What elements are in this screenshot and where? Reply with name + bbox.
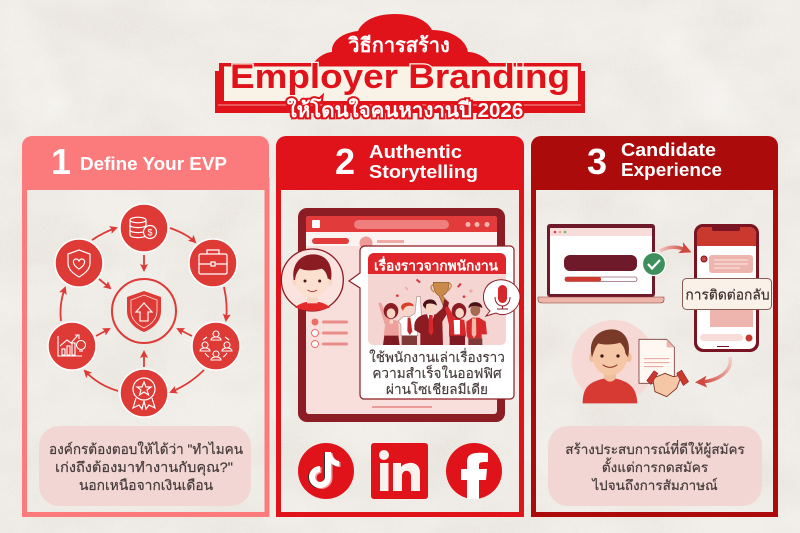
handshake [647, 370, 689, 397]
panel: authentic storytelling [276, 136, 524, 514]
title line 2: Employer Branding [230, 58, 570, 96]
icon: team [192, 322, 240, 370]
panel 2 header [276, 136, 524, 190]
panel 1 header [22, 136, 269, 190]
phone [694, 224, 759, 352]
icon: heart shield [55, 239, 103, 287]
panel: candidate experience [531, 136, 778, 514]
celebrating team illustration [368, 274, 506, 345]
icon: coins: $ [147, 228, 153, 238]
icon: LinkedIn [371, 443, 428, 499]
icon: TikTok [298, 443, 354, 499]
speech bubble: เรื่องราวจากพนักงาน [374, 256, 499, 274]
icon: Facebook [446, 443, 502, 499]
panel 3 frame [534, 180, 776, 514]
title cloud [313, 14, 490, 64]
panel 3 text box: ตั้งแต่การกดสมัคร [602, 457, 708, 475]
tablet mockup [298, 208, 505, 422]
microphone bubble [483, 280, 520, 316]
speech bubble [349, 246, 520, 399]
arrow: laptop to phone [660, 247, 686, 251]
panel 3 text box [548, 426, 762, 506]
panel 2 number: 2 [335, 141, 355, 182]
bubble text: ใช้พนักงานเล่าเรื่องราว [369, 348, 505, 365]
central shield [112, 279, 176, 343]
candidate illustration [572, 320, 655, 403]
panel: define your EVP [22, 136, 269, 514]
panel 1 number: 1 [51, 141, 71, 182]
laptop [538, 224, 666, 303]
arrow: phone to handshake [701, 357, 730, 382]
panel 1 text box: นอกเหนือจากเงินเดือน [79, 478, 214, 493]
title banner [215, 14, 585, 122]
bubble text: ผ่านโซเชียลมีเดีย [386, 381, 488, 397]
bubble text [369, 348, 505, 397]
arrows cycle [60, 228, 227, 392]
panel 3 number: 3 [587, 141, 607, 182]
panel 1 text box [39, 426, 251, 506]
document [639, 339, 674, 383]
panel 2 frame [278, 180, 522, 514]
panel 2 heading [369, 141, 478, 182]
panel 3 header [531, 136, 778, 190]
icon: briefcase [189, 239, 237, 287]
panel 3 heading: Candidate [621, 139, 716, 160]
panel 1 heading: Define Your EVP [80, 153, 227, 174]
panel 2 heading: Authentic [369, 141, 462, 162]
check badge [642, 252, 666, 276]
panel 1 frame [24, 180, 267, 514]
icon: growth chart [48, 322, 96, 370]
avatar [281, 249, 343, 311]
bubble heading [368, 253, 506, 274]
title line 3: ให้โดนใจคนหางานปี 2026 [287, 97, 523, 122]
panel 3 text box: ไปจนถึงการสัมภาษณ์ [591, 477, 718, 493]
bubble text: ความสำเร็จในออฟฟิศ [372, 364, 502, 381]
label: callback [682, 278, 772, 310]
label: callback: การติดต่อกลับ [685, 288, 770, 302]
title line 1: วิธีการสร้าง [347, 34, 450, 57]
panel 2 heading: Storytelling [369, 161, 478, 182]
panel 3 text box: สร้างประสบการณ์ที่ดีให้ผู้สมัคร [565, 440, 745, 458]
panel 3 heading [621, 139, 722, 180]
panel 1 text box: เก่งถึงต้องมาทำงานกับคุณ?" [55, 460, 233, 476]
panel 1 text box: องค์กรต้องตอบให้ได้ว่า "ทำไมคน [49, 441, 244, 457]
icon: coins [120, 204, 168, 252]
icon: award [120, 369, 168, 417]
panel 3 heading: Experience [621, 159, 722, 180]
